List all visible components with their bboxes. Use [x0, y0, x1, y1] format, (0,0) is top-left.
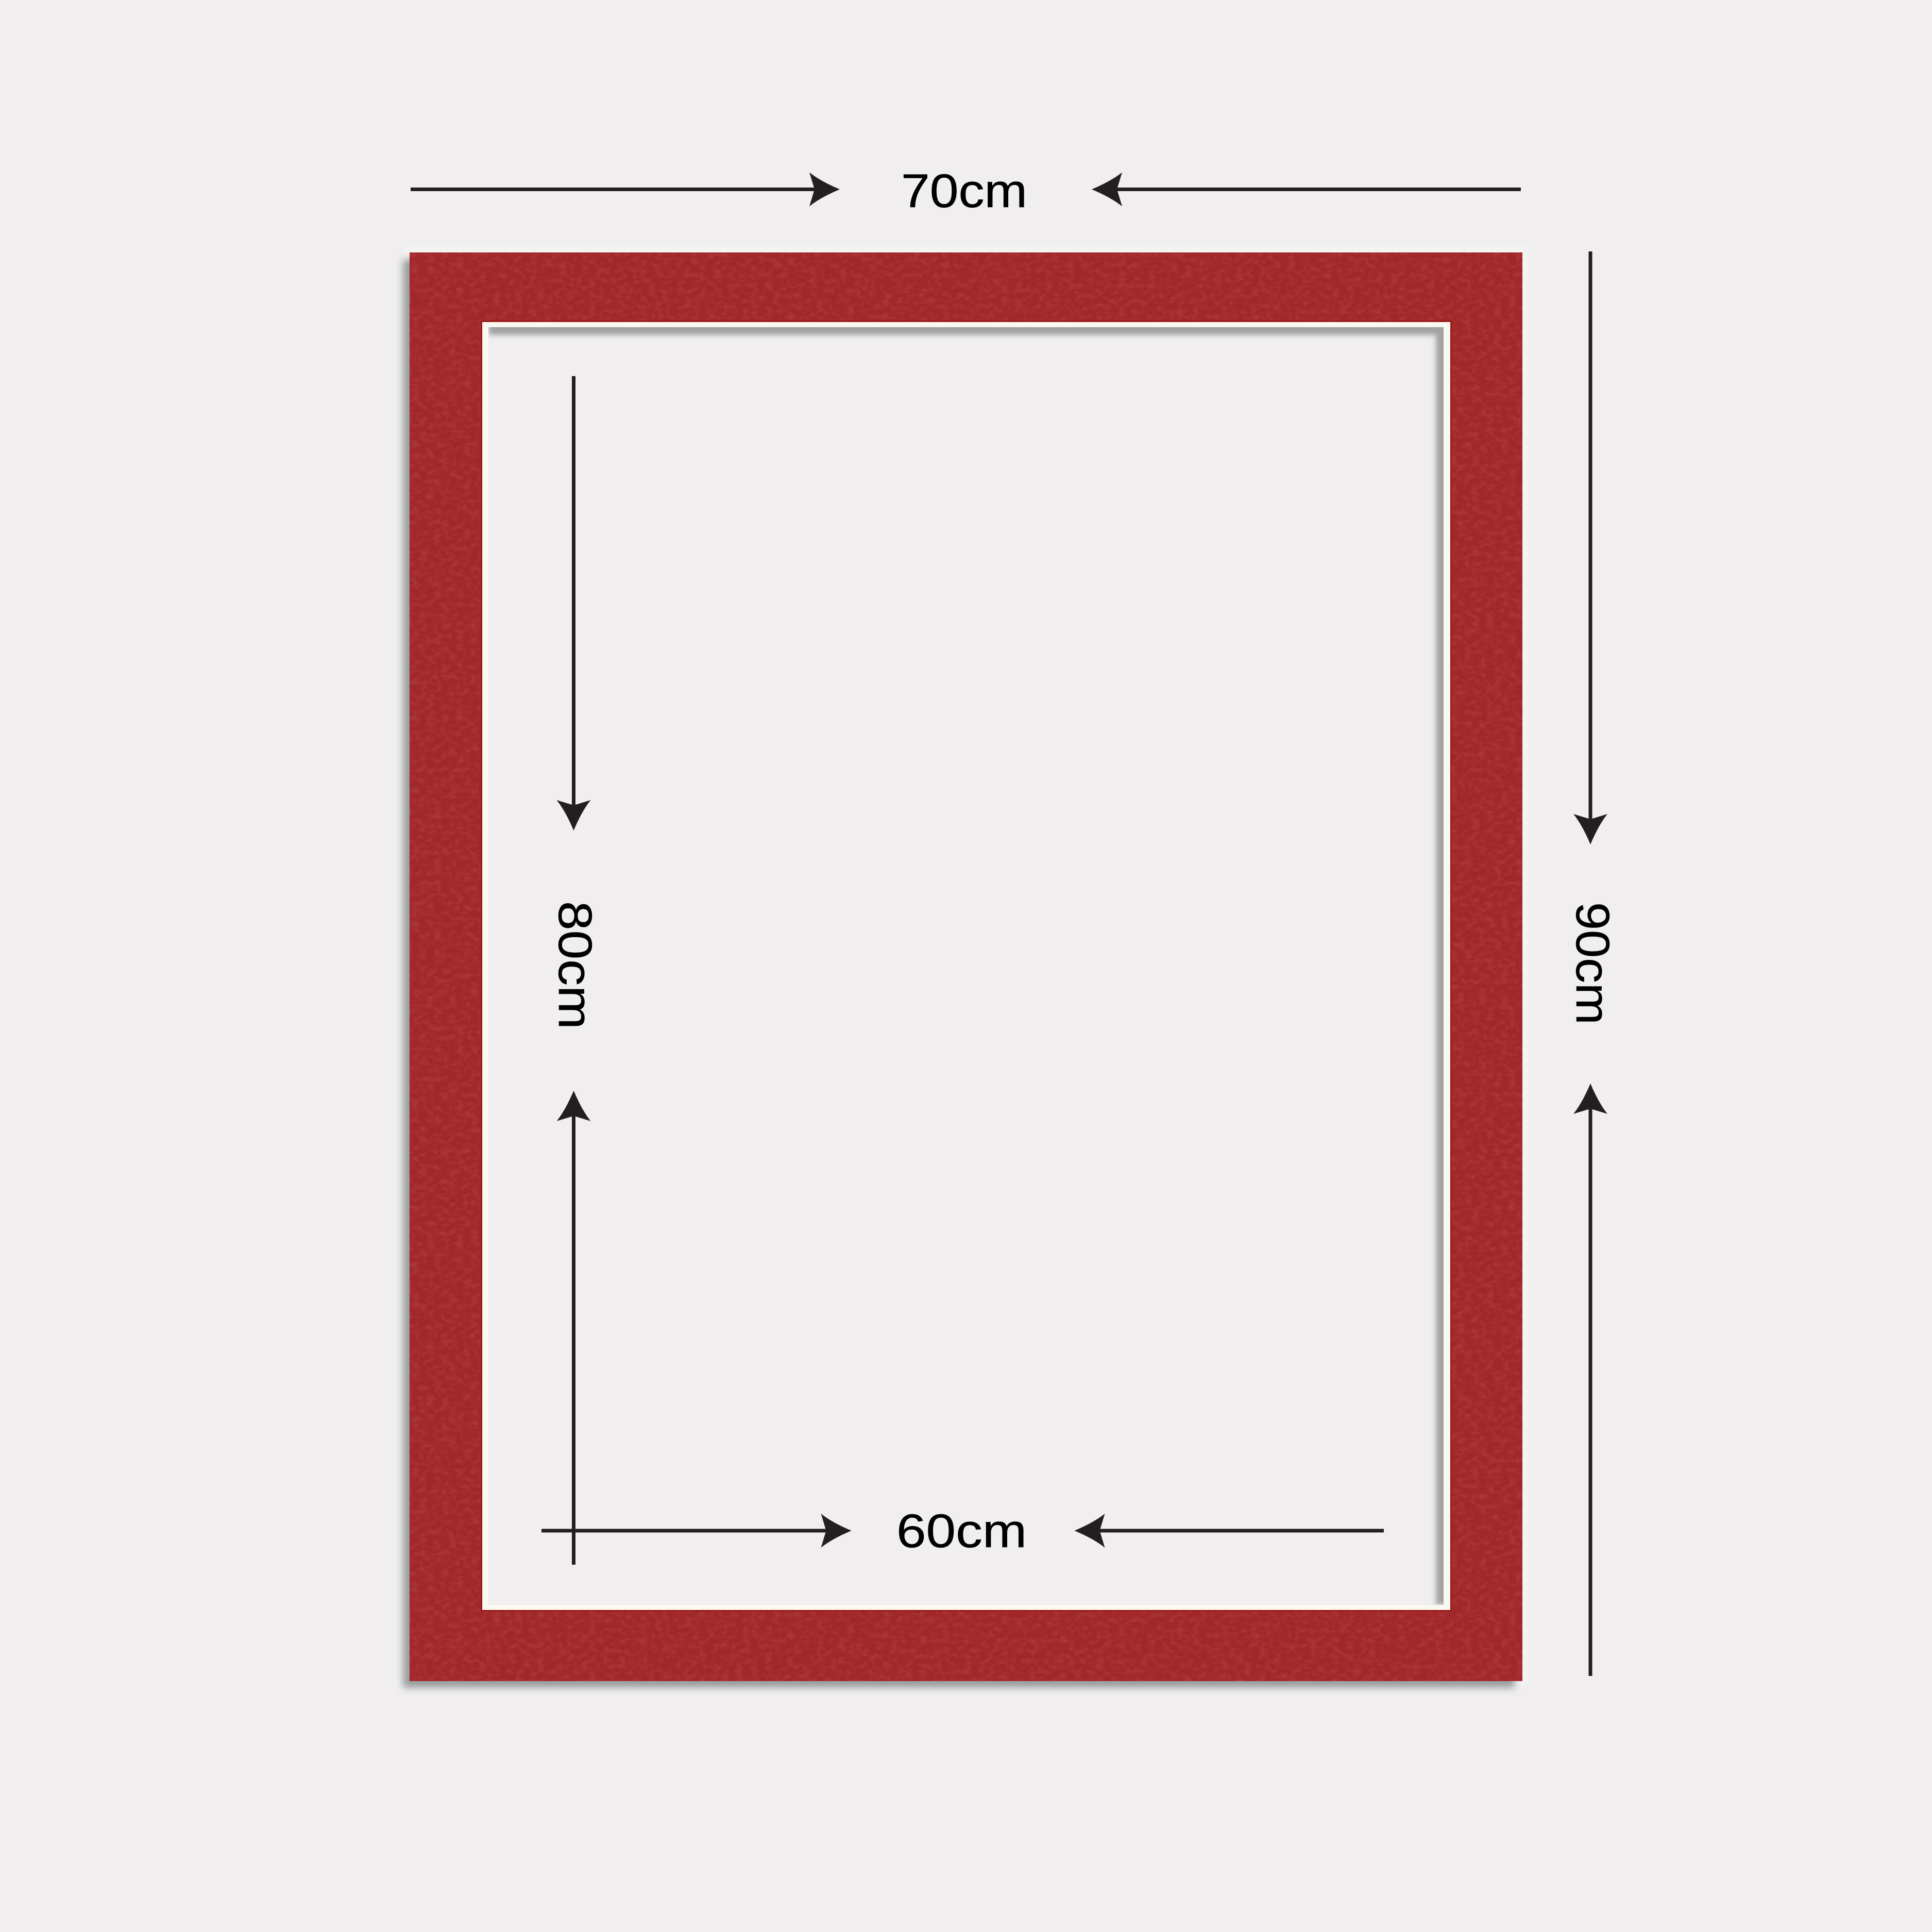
label: 90cm: 90cm [1566, 902, 1619, 1025]
label: 60cm: 60cm [896, 1505, 1027, 1557]
dimension: outer height 90cm [1566, 251, 1619, 1676]
dimension: inner width 60cm [541, 1505, 1384, 1557]
arrow: right side pointing down [1573, 251, 1607, 844]
window inner shadow [488, 329, 1442, 1605]
red mat border [410, 252, 1522, 1681]
mat outer light halo [404, 247, 1528, 1685]
mat board frame [403, 247, 1528, 1688]
window opening [488, 327, 1444, 1605]
dimension: outer width 70cm [411, 165, 1521, 217]
dimension: inner height 80cm [549, 376, 601, 1565]
arrow: right side pointing up [1573, 1083, 1607, 1676]
arrow: top left pointing right [411, 172, 840, 206]
arrow: bottom right pointing left [1075, 1514, 1384, 1548]
arrow: bottom left pointing right [541, 1514, 851, 1548]
arrow: left side pointing up [556, 1091, 590, 1565]
mat drop shadow [403, 259, 1515, 1688]
arrow: left side pointing down [556, 376, 590, 831]
label: 80cm: 80cm [549, 901, 601, 1029]
dark red cut edge [482, 321, 1451, 1611]
label: 70cm: 70cm [901, 165, 1027, 217]
arrow: top right pointing left [1092, 172, 1521, 206]
mat paper texture [410, 252, 1522, 1681]
cream bevel of window [482, 322, 1450, 1610]
